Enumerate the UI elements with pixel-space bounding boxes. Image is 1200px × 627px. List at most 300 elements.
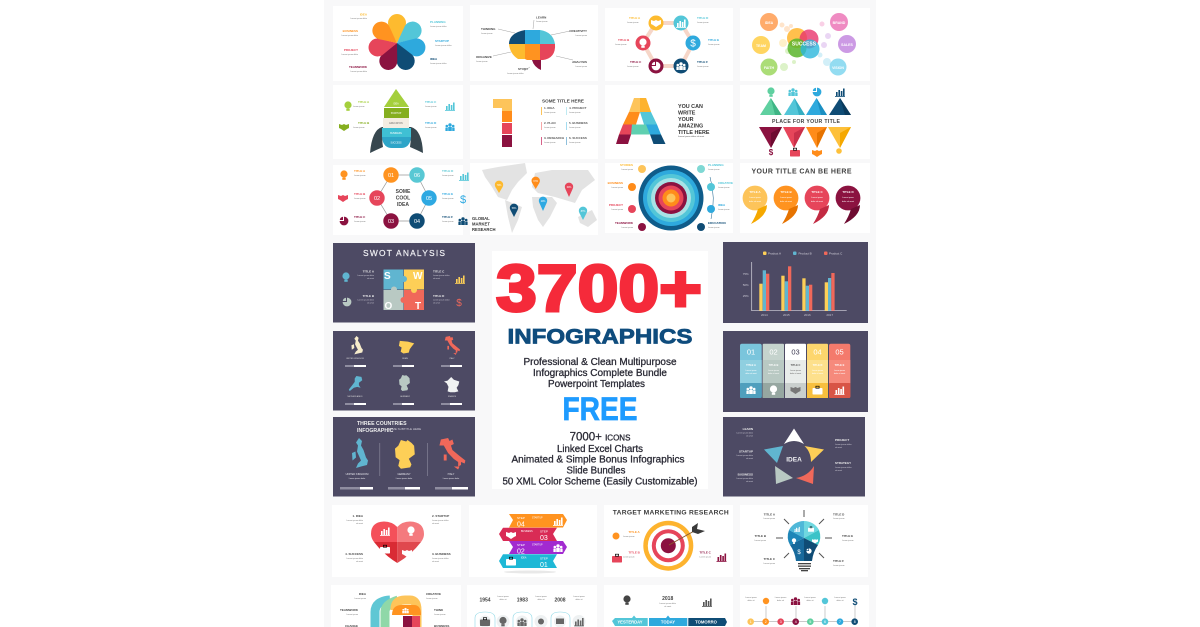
petal labels right: STARTUP — [435, 39, 449, 43]
panel: brain puzzle — [470, 5, 598, 81]
comma bubbles: Lorem ipsum — [749, 197, 761, 199]
step titles: TITLE B — [769, 363, 779, 367]
SWOT labels left — [342, 270, 375, 306]
three country maps — [352, 438, 465, 476]
country captions: SPAIN — [402, 357, 408, 360]
comma bubbles: dolor sit amet — [780, 200, 792, 203]
brain labels: Lorem ipsum — [575, 35, 587, 37]
hexagon side icons and labels: Lorem ipsum — [354, 198, 366, 200]
star labels right: PROJECT — [835, 438, 849, 442]
brain leader lines — [493, 20, 573, 71]
target icons and labels — [612, 530, 726, 562]
heading: SOME TITLE HERE — [542, 98, 584, 104]
timeline years — [479, 598, 566, 604]
panel: letter A — [605, 85, 733, 159]
chart legend: Product B — [798, 252, 812, 256]
step numbers: 01 — [747, 348, 755, 356]
map continents — [482, 163, 597, 233]
brain labels: Lorem ipsum — [476, 61, 488, 63]
step labels: BUSINESS — [521, 531, 533, 533]
rocket side icons and labels: TITLE C — [425, 100, 437, 104]
heart labels: 4. SUCCESS — [345, 552, 363, 556]
heart labels: sit amet — [432, 522, 439, 525]
step labels: STARTUP — [532, 544, 543, 546]
SWOT labels left: sit amet — [367, 277, 374, 280]
ring labels: TITLE A — [629, 16, 641, 20]
hexagon side icons and labels: TITLE E — [442, 192, 453, 196]
three country captions: ITALY — [448, 472, 455, 476]
step body copy: Lorem ipsum — [834, 369, 845, 372]
hexagon side icons and labels: Lorem ipsum — [442, 175, 454, 177]
ribbon labels: Lorem ipsum — [434, 614, 446, 616]
step labels: 04 — [517, 522, 525, 528]
feature list — [502, 432, 698, 488]
three country captions: Lorem ipsum dolor — [349, 478, 366, 480]
step labels: STEP — [540, 530, 548, 534]
step numbers: 05 — [835, 348, 844, 356]
panel: heart puzzle — [332, 505, 461, 577]
panel: world map — [470, 163, 598, 235]
line captions: dolor sit — [747, 599, 755, 602]
target icons and labels: TITLE A — [628, 530, 641, 534]
bulb labels: Lorem ipsum — [754, 540, 766, 542]
arrow ribbons — [499, 514, 567, 574]
star labels left: STARTUP — [739, 450, 753, 454]
ring labels: Lorem ipsum — [627, 22, 639, 24]
step labels: 01 — [540, 562, 548, 569]
numbered circles: 04 — [414, 219, 420, 225]
rocket body: SUCCESS — [390, 142, 402, 144]
rocket side icons and labels: TITLE A — [358, 100, 370, 104]
timeline years: 1954 — [479, 598, 491, 604]
heart labels: Lorem ipsum dolor — [432, 558, 449, 560]
list items: 6. SUCCESS — [569, 136, 587, 140]
brain labels: ORGANIZE — [476, 55, 492, 59]
hexagon side icons and labels: Lorem ipsum — [442, 198, 454, 200]
timeline captions: dolor sit — [575, 598, 583, 601]
numbered nodes: 3 — [780, 620, 782, 624]
timeline bar: TODAY — [661, 620, 675, 624]
line captions — [745, 597, 846, 602]
FREE: FREE — [562, 391, 638, 427]
target labels: Lorem ipsum — [708, 169, 720, 171]
SWOT labels left: Lorem ipsum dolor — [357, 300, 374, 302]
year caption: 2018 — [662, 596, 673, 602]
list items: Lorem ipsum — [544, 112, 556, 114]
SWOT labels left: Lorem ipsum dolor — [357, 275, 374, 277]
timeline bar — [612, 616, 727, 626]
star labels left: sit amet — [746, 434, 753, 438]
A slide title: WRITE — [678, 110, 696, 116]
y axis labels: 75% — [743, 272, 749, 276]
step body copy: dolor sit amet — [790, 372, 802, 375]
target labels: CREATIVE — [718, 181, 733, 185]
step numbers: 04 — [813, 348, 822, 356]
numeral one — [493, 99, 512, 147]
bubble SUCCESS: SUCCESS — [792, 42, 817, 48]
heart labels: sit amet — [356, 522, 363, 525]
bulb labels: Lorem ipsum — [833, 518, 845, 520]
lower triangles — [759, 127, 851, 148]
petal labels right: Lorem ipsum dolor — [430, 26, 447, 28]
three countries title: THREE COUNTRIES — [357, 421, 407, 427]
bullseye — [643, 521, 693, 571]
comma bubbles: TITLE C — [811, 190, 823, 194]
rocket body: EDUCATION — [389, 122, 403, 125]
step body copy: dolor sit amet — [768, 372, 780, 375]
target title: TARGET MARKETING RESEARCH — [613, 510, 729, 516]
country captions — [346, 357, 457, 398]
step numbers: 03 — [791, 348, 800, 356]
arrow in target — [669, 523, 705, 545]
step columns — [740, 344, 850, 398]
timeline bar: YESTERDAY — [617, 620, 643, 624]
line connectors — [751, 606, 855, 622]
brain labels: LEARN — [536, 16, 546, 20]
x axis labels — [761, 313, 833, 317]
heart labels: sit amet — [356, 560, 363, 563]
heart labels — [345, 514, 451, 563]
y axis labels — [743, 272, 749, 298]
three countries title: SOME SUBTITLE HERE — [388, 427, 421, 431]
comma bubbles: TITLE B — [780, 190, 792, 194]
ring labels: Lorem ipsum — [627, 66, 639, 68]
target labels: Lorem ipsum — [718, 209, 730, 211]
three country captions: Lorem ipsum dolor — [396, 478, 413, 480]
list items — [541, 106, 588, 145]
ring connectors — [643, 23, 693, 66]
SWOT labels right — [433, 270, 465, 309]
chart axes — [752, 262, 847, 311]
brain labels: Lorem ipsum — [481, 33, 493, 35]
SWOT labels right: TITLE D — [433, 294, 445, 298]
step body copy: dolor sit amet — [745, 372, 757, 375]
step body copy: Lorem ipsum — [746, 369, 757, 372]
panel: hexagon ring — [605, 8, 733, 81]
list items: 3. RESEARCH — [544, 136, 564, 140]
timeline years: 1983 — [517, 598, 528, 604]
SWOT labels right: Lorem ipsum dolor — [433, 275, 450, 277]
three country captions: GERMANY — [397, 472, 411, 476]
step icons — [746, 385, 844, 395]
comma title: YOUR TITLE CAN BE HERE — [752, 168, 852, 176]
feature list: Linked Excel Charts — [557, 444, 643, 455]
comma bubbles: dolor sit amet — [749, 200, 761, 203]
step titles: TITLE E — [835, 363, 845, 367]
country captions: FRANCE — [448, 395, 457, 398]
bubble FAITH: FAITH — [764, 66, 775, 70]
heading infographics: INFOGRAPHICS — [508, 324, 692, 348]
x axis labels: 2015 — [783, 313, 790, 317]
numbered circles: 05 — [426, 196, 432, 202]
numbered nodes: 4 — [795, 620, 797, 624]
panel: yesterday today tomorrow — [604, 585, 733, 627]
star labels right: sit amet — [835, 469, 842, 472]
rocket wings — [370, 127, 423, 153]
brain labels: THINKING — [481, 27, 496, 31]
petal labels left: PROJECT — [344, 48, 358, 52]
ring labels: Lorem ipsum — [615, 44, 627, 46]
list items: 5. BUSINESS — [569, 121, 588, 125]
three countries title: INFOGRAPHIC — [357, 428, 394, 434]
country bars — [345, 365, 462, 405]
small bubbles — [779, 22, 831, 71]
bulb segments: $ — [797, 550, 801, 556]
star labels left: Lorem ipsum dolor — [736, 455, 753, 457]
y axis labels: 50% — [743, 283, 749, 287]
ring line — [377, 175, 429, 221]
line captions: Lorem ipsum — [834, 597, 846, 599]
SWOT puzzle: T — [415, 301, 421, 312]
center text — [396, 189, 411, 208]
panel: idea star — [723, 417, 865, 496]
rocket side icons and labels: Lorem ipsum — [353, 127, 365, 129]
map pins: 70% — [497, 185, 501, 187]
hexagon side icons and labels: TITLE A — [354, 169, 366, 173]
star labels right: Lorem ipsum dolor — [835, 444, 852, 446]
three country captions: Lorem ipsum dolor — [443, 478, 460, 480]
heart labels: 1. IDEA — [352, 514, 364, 518]
heart labels: 3. BUSINESS — [432, 552, 451, 556]
center label: IDEA — [786, 456, 802, 464]
target icons and labels: Lorem ipsum — [623, 556, 635, 558]
panel: bar chart — [723, 242, 868, 323]
step body copy: Lorem ipsum — [768, 369, 779, 372]
panel: light bulb — [740, 505, 868, 577]
heart labels: 2. STARTUP — [432, 514, 449, 518]
hexagon side icons and labels: TITLE C — [354, 215, 366, 219]
timeline captions: Lorem ipsum — [535, 596, 547, 598]
SWOT labels left: TITLE A — [363, 270, 375, 274]
step labels: IDEA — [521, 556, 527, 560]
panel: target marketing research — [604, 505, 733, 577]
step titles: TITLE C — [791, 363, 801, 367]
SWOT labels right: Lorem ipsum dolor — [433, 300, 450, 302]
petal labels right: IDEA — [430, 57, 438, 61]
heart labels: sit amet — [432, 560, 439, 563]
bubble TEAM: TEAM — [756, 44, 766, 48]
list items: 4. PROJECT — [569, 106, 587, 110]
numbered circles — [369, 167, 437, 229]
timeline captions: Lorem ipsum — [497, 596, 509, 598]
year caption: Lorem ipsum dolor — [659, 603, 676, 605]
rocket side icons and labels: TITLE D — [425, 121, 437, 125]
panel: headline card — [492, 251, 708, 489]
star labels left: BUSINESS — [738, 472, 753, 476]
panel: flower infographic — [333, 6, 463, 81]
panel: triangles — [740, 85, 870, 159]
hexagon side icons and labels — [338, 169, 469, 225]
rocket side icons and labels — [339, 100, 455, 131]
ribbon labels: IDEA — [359, 592, 367, 596]
comma bubbles: TITLE A — [749, 190, 761, 194]
SWOT labels right: TITLE C — [433, 270, 445, 274]
rocket body: IDEA — [393, 102, 399, 106]
SWOT puzzle: W — [413, 271, 423, 282]
SWOT puzzle: O — [384, 301, 392, 312]
timeline captions: Lorem ipsum — [573, 596, 585, 598]
A slide title: AMAZING — [678, 124, 703, 130]
bubble VISION: VISION — [832, 66, 844, 70]
timeline bar: TOMORRO — [695, 620, 718, 624]
numbered nodes — [747, 618, 858, 625]
list items: 2. PLAN — [544, 121, 556, 125]
bulb labels: TITLE B — [755, 534, 767, 538]
SWOT labels right: sit amet — [433, 277, 440, 280]
center text: COOL — [396, 196, 410, 202]
star labels left: sit amet — [746, 457, 753, 460]
year caption — [659, 596, 676, 608]
step body copy: Lorem ipsum — [812, 369, 823, 372]
comma bubbles: Lorem ipsum — [811, 197, 823, 199]
panel: rocket — [333, 85, 463, 159]
bulb labels: TITLE F — [833, 559, 844, 563]
hexagon side icons and labels: TITLE D — [442, 169, 454, 173]
bulb labels: TITLE D — [833, 512, 845, 516]
brain labels: Lorem ipsum — [536, 21, 548, 23]
star labels right: STRATEGY — [835, 461, 851, 465]
A slide title: TITLE HERE — [678, 130, 710, 136]
star triangles — [764, 428, 824, 484]
brain labels: Lorem ipsum — [575, 66, 587, 68]
petal labels right — [430, 20, 452, 65]
ring labels: TITLE F — [697, 60, 708, 64]
step labels: STEP — [517, 543, 525, 547]
bulb labels: Lorem ipsum — [833, 565, 845, 567]
brain labels: ANALYSIS — [572, 60, 587, 64]
A slide title: Lorem ipsum dolor sit amet — [678, 135, 705, 138]
SWOT labels right: $ — [456, 298, 462, 309]
panel: three countries — [333, 417, 475, 496]
numbered circles: 02 — [374, 196, 380, 202]
line captions: dolor sit — [806, 599, 814, 602]
target labels: BUSINESS — [608, 181, 623, 185]
heart labels: Lorem ipsum dolor — [346, 520, 363, 522]
triangles icons: $ — [769, 148, 774, 157]
ribbon labels: Lorem ipsum — [346, 614, 358, 616]
feature list: Animated & Simple Bonus Infographics — [512, 454, 684, 466]
target labels — [608, 163, 733, 229]
numbered nodes: 6 — [824, 620, 826, 624]
target labels: PLANNING — [708, 163, 724, 167]
petal labels left: TEAMWORK — [349, 65, 368, 69]
petal labels left: Lorem ipsum dolor — [341, 35, 358, 37]
center text: SOME — [396, 189, 411, 195]
map pins: 53% — [512, 208, 516, 210]
rocket side icons and labels: Lorem ipsum — [425, 106, 437, 108]
list items: Lorem ipsum — [569, 112, 581, 114]
map heading: RESEARCH — [472, 227, 496, 232]
ribbon labels: CREATIVE — [426, 592, 441, 596]
petal labels left — [341, 12, 368, 73]
step titles — [746, 363, 845, 367]
numbered nodes: 2 — [765, 620, 767, 624]
chart: flower petals — [367, 14, 427, 73]
star labels right: Lorem ipsum dolor — [835, 467, 852, 469]
rocket body: STARTUP — [391, 112, 402, 115]
ring labels: Lorem ipsum — [697, 66, 709, 68]
panel: watercolor bubbles — [740, 8, 870, 81]
hexagon side icons and labels: TITLE B — [354, 192, 366, 196]
x axis labels: 2016 — [804, 313, 811, 317]
bulb rays — [776, 510, 832, 558]
star labels left: LEARN — [743, 427, 753, 431]
headline 3700+: 3700+ — [496, 251, 702, 325]
country maps — [349, 336, 460, 392]
subtitle — [524, 357, 677, 390]
step numbers: 02 — [769, 348, 778, 356]
panel: number one — [470, 85, 598, 159]
triangles title: PLACE FOR YOUR TITLE — [772, 119, 841, 125]
step labels: 03 — [540, 535, 548, 542]
country captions: ITALY — [449, 357, 455, 360]
numbered circles: 01 — [388, 173, 394, 179]
bulb labels: Lorem ipsum — [763, 563, 775, 565]
brain labels — [476, 16, 587, 75]
hexagon side icons and labels: Lorem ipsum — [442, 221, 454, 223]
bulb labels: TITLE E — [842, 534, 853, 538]
subtitle: Professional & Clean Multipurpose — [524, 357, 677, 368]
petal labels left: BUSINESS — [343, 29, 358, 33]
center text: IDEA — [397, 202, 409, 208]
timeline years: 2008 — [554, 598, 566, 604]
hexagon side icons and labels: TITLE F — [442, 215, 453, 219]
target labels: Lorem ipsum — [611, 209, 623, 211]
line icons: $ — [852, 597, 858, 607]
SWOT labels right: sit amet — [433, 302, 440, 304]
map pins: 67% — [533, 181, 538, 183]
ring nodes: $ — [690, 38, 696, 50]
bubble IDEA: IDEA — [765, 21, 774, 25]
map heading: GLOBAL — [472, 216, 490, 221]
ribbon labels: Lorem ipsum — [354, 598, 366, 600]
target labels: Lorem ipsum — [611, 187, 623, 189]
star labels left: sit amet — [746, 480, 753, 483]
target side nodes — [628, 165, 715, 231]
panel: five steps — [723, 331, 868, 412]
chart legend — [763, 252, 843, 256]
bulb labels: Lorem ipsum — [763, 518, 775, 520]
target labels: IDEA — [718, 203, 726, 207]
panel: six country maps — [333, 331, 475, 410]
rocket side icons and labels: Lorem ipsum — [353, 106, 365, 108]
step titles: TITLE D — [813, 363, 823, 367]
A slide title: YOU CAN — [678, 104, 703, 110]
target labels: Lorem ipsum — [718, 187, 730, 189]
target icons and labels: Lorem ipsum — [623, 536, 635, 538]
heart — [371, 522, 424, 563]
comma bubbles: dolor sit amet — [842, 200, 854, 203]
heart labels: Lorem ipsum dolor — [432, 520, 449, 522]
ring labels: TITLE C — [630, 60, 642, 64]
comma bubbles: Lorem ipsum — [842, 197, 854, 199]
hexagon side icons and labels: $ — [460, 194, 466, 206]
ring labels: TITLE D — [697, 16, 709, 20]
feature list: Slide Bundles — [566, 466, 626, 476]
target labels: PROJECT — [609, 203, 623, 207]
brain labels: Lorem ipsum dolor — [507, 73, 524, 75]
rocket body — [382, 89, 411, 148]
rocket side icons and labels: TITLE B — [358, 121, 370, 125]
feature list: 50 XML Color Scheme (Easily Customizable) — [502, 476, 698, 488]
three country bars — [340, 487, 468, 490]
target labels: EDUCATION — [708, 221, 726, 225]
letter A — [616, 98, 666, 144]
comma bubbles: dolor sit amet — [811, 200, 823, 203]
panel: curved ribbons — [331, 585, 461, 627]
chart legend: Product C — [829, 252, 843, 256]
star labels left — [736, 427, 753, 483]
